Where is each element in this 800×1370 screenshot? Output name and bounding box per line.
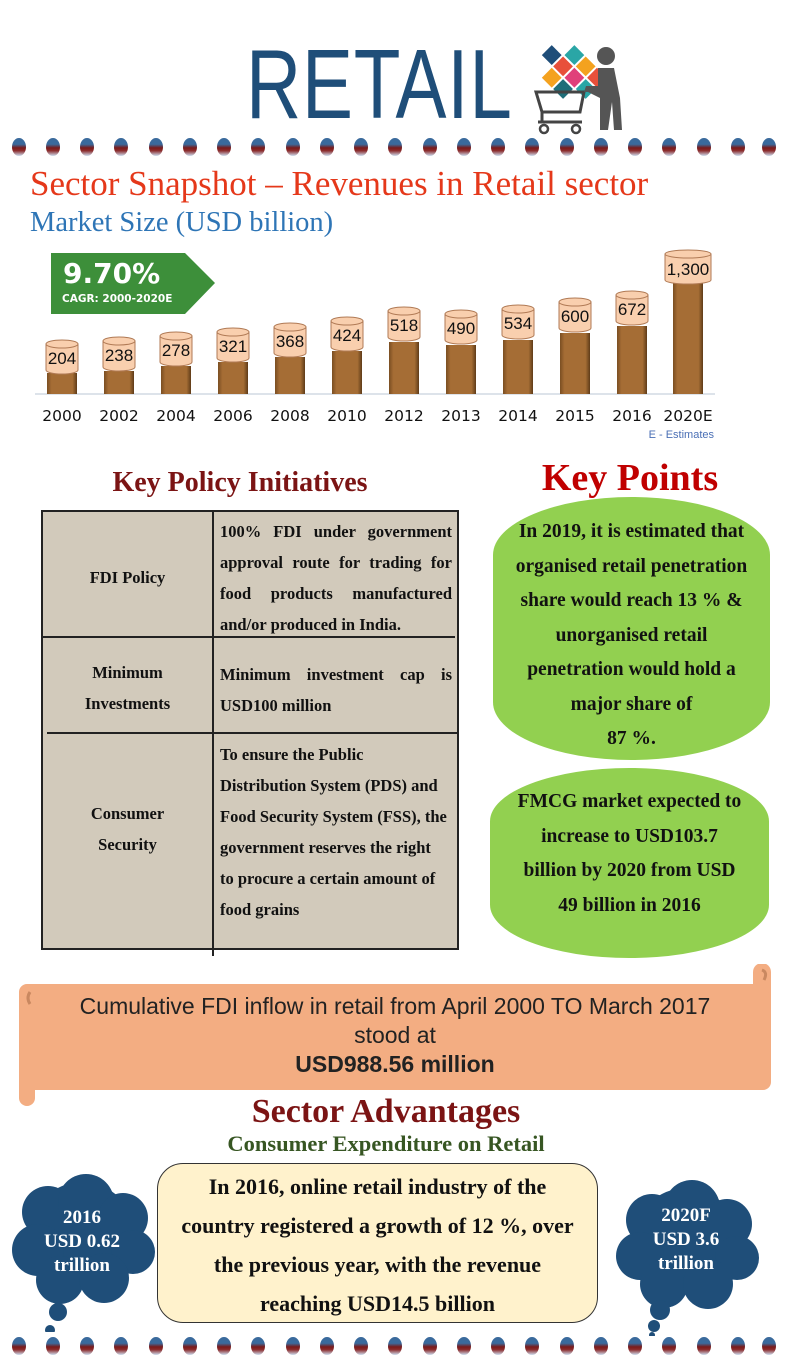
bar chart: 2002	[99, 407, 139, 425]
bar chart: 2020E	[663, 407, 713, 425]
panel: key point 1: major share of	[571, 694, 692, 714]
panel: FDI scroll banner: stood at	[354, 1022, 436, 1048]
panel: policy table: Food Security System (FSS), the	[220, 807, 447, 826]
icon: cloud 2020F: USD 3.6	[653, 1229, 719, 1250]
heading: sector snapshot: Sector Snapshot – Revenues in Retail sector	[30, 164, 648, 203]
panel: key point 1: unorganised retail	[556, 624, 707, 646]
panel: policy table: USD100 million	[220, 696, 331, 715]
value cylinders	[46, 250, 711, 374]
callout: CAGR arrow: 9.70%	[63, 257, 160, 290]
panel: key point 1: 87 %.	[607, 728, 656, 749]
bar chart: 2008	[270, 407, 310, 425]
bottom dotted divider	[12, 1337, 776, 1355]
bar chart: 2016	[612, 407, 652, 425]
panel: key point 1: In 2019, it is estimated that	[519, 521, 744, 542]
icon: cloud 2020F	[616, 1180, 759, 1336]
panel: online retail text box: reaching USD14.5 billion	[260, 1291, 495, 1316]
panel: policy table	[41, 510, 459, 950]
bar chart: 490	[447, 319, 475, 338]
bar chart: E - Estimates	[649, 429, 714, 441]
row: minimum investments: Minimum	[92, 663, 163, 682]
panel: policy table: to procure a certain amount of	[220, 869, 435, 888]
panel: online retail text box: In 2016, online retail industry of the	[209, 1174, 546, 1199]
bar chart: 2000	[42, 407, 82, 425]
bar chart: 368	[276, 332, 304, 351]
bar chart: 1,300	[667, 260, 709, 279]
panel: policy table: Distribution System (PDS) and	[220, 776, 438, 795]
panel: policy table: To ensure the Public	[220, 745, 363, 764]
panel: policy table: and/or produced in India.	[220, 615, 401, 634]
heading: sector advantages: Sector Advantages	[252, 1093, 520, 1130]
bar chart: 518	[390, 316, 418, 335]
bar chart: 321	[219, 337, 247, 356]
bar chart: 278	[162, 341, 190, 360]
bar chart: 2015	[555, 407, 595, 425]
top dotted divider	[12, 138, 776, 156]
bar chart: 2010	[327, 407, 367, 425]
panel: FDI scroll banner: USD988.56 million	[295, 1051, 495, 1077]
bar chart: 2013	[441, 407, 481, 425]
heading: key policy initiatives: Key Policy Initiatives	[112, 467, 368, 498]
bar chart: 2004	[156, 407, 196, 425]
bar chart: 204	[48, 349, 76, 368]
row: minimum investments	[85, 663, 170, 713]
panel: policy table: food products manufactured	[220, 584, 452, 603]
panel: policy table: government reserves the right	[220, 838, 431, 857]
title: RETAIL	[246, 29, 513, 139]
subheading: market size: Market Size (USD billion)	[30, 207, 333, 238]
bar chart: 534	[504, 314, 532, 333]
panel: online retail text box	[157, 1163, 598, 1323]
bars	[47, 283, 703, 394]
row: consumer security: Security	[98, 835, 157, 854]
bar chart: 600	[561, 307, 589, 326]
bar chart: 2012	[384, 407, 424, 425]
icon: cloud 2020F: 2020F	[661, 1205, 711, 1226]
panel: key point 1: share would reach 13 % &	[521, 590, 742, 611]
icon: cloud 2016: trillion	[54, 1255, 110, 1276]
icon: shopper with cart	[534, 45, 622, 134]
icon: cloud 2016: 2016	[63, 1207, 101, 1228]
panel: key point 2: 49 billion in 2016	[558, 894, 701, 916]
panel: key point 2	[490, 768, 769, 958]
row: FDI policy: FDI Policy	[90, 568, 165, 587]
bar chart: 238	[105, 346, 133, 365]
panel: FDI scroll banner	[19, 964, 771, 1106]
row: minimum investments: Investments	[85, 694, 170, 713]
bar chart: 2006	[213, 407, 253, 425]
panel: key point 1: penetration would hold a	[527, 659, 736, 680]
panel: online retail text box: country registered a growth of 12 %, over	[181, 1213, 574, 1238]
panel: key point 2: billion by 2020 from USD	[523, 860, 736, 881]
panel: FDI scroll banner: Cumulative FDI inflow in retail from April 2000 TO March 2017	[80, 993, 710, 1019]
panel: policy table: approval route for trading for	[220, 553, 452, 572]
heading: key points: Key Points	[542, 457, 718, 499]
icon: cloud 2016: USD 0.62	[44, 1231, 120, 1252]
icon: cloud 2016	[12, 1174, 155, 1332]
callout: CAGR arrow: CAGR: 2000-2020E	[62, 293, 172, 305]
panel: key point 1	[493, 497, 770, 760]
panel: key point 2: increase to USD103.7	[541, 826, 718, 846]
panel: key point 2: FMCG market expected to	[518, 791, 741, 812]
bar chart: 672	[618, 300, 646, 319]
bar chart: 2014	[498, 407, 538, 425]
subheading: consumer expenditure: Consumer Expenditure on Retail	[227, 1131, 545, 1156]
callout: CAGR arrow	[51, 253, 215, 314]
icon: cloud 2020F: trillion	[658, 1253, 714, 1274]
panel: policy table: 100% FDI under government	[220, 522, 452, 541]
bar chart	[35, 250, 715, 441]
panel: key point 1: organised retail penetration	[516, 556, 747, 576]
panel: online retail text box: the previous year, with the revenue	[214, 1252, 541, 1277]
bar chart: 424	[333, 326, 361, 345]
row: consumer security	[91, 804, 164, 854]
row: consumer security: Consumer	[91, 804, 164, 823]
panel: policy table: Minimum investment cap is	[220, 665, 452, 684]
panel: policy table: food grains	[220, 900, 299, 919]
